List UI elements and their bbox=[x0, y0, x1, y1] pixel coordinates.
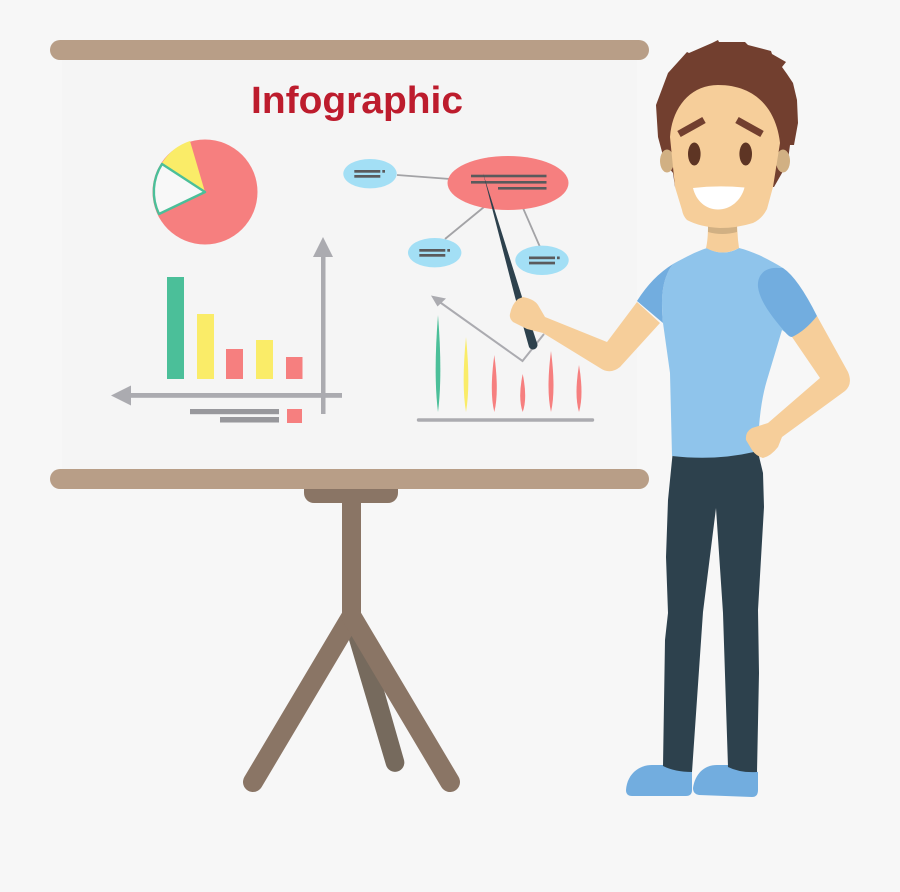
eyes bbox=[688, 142, 752, 166]
top rail bbox=[50, 40, 649, 60]
right arm and hand bbox=[746, 316, 850, 458]
paper bbox=[62, 60, 637, 470]
spike chart bbox=[418, 296, 592, 420]
bottom rail bbox=[50, 469, 649, 489]
trend arrow bbox=[431, 296, 544, 361]
shoes bbox=[626, 765, 758, 797]
connector lines bbox=[397, 175, 540, 247]
baseline bbox=[418, 418, 592, 422]
t-shirt body bbox=[662, 248, 792, 458]
spikes bbox=[436, 315, 582, 412]
neck bbox=[706, 225, 739, 252]
pointer stick bbox=[483, 173, 537, 349]
vertical axis arrow bbox=[313, 237, 333, 414]
blue node right bbox=[515, 246, 569, 275]
face bbox=[670, 85, 780, 228]
pie chart bbox=[152, 140, 258, 244]
pole bbox=[342, 495, 361, 620]
presentation board bbox=[50, 40, 649, 489]
title: Infographic bbox=[251, 80, 463, 122]
white outlined slice bbox=[154, 164, 205, 214]
mind map diagram bbox=[343, 156, 569, 275]
ears bbox=[660, 150, 790, 172]
easel stand bbox=[253, 489, 450, 782]
horizontal axis arrow bbox=[111, 386, 342, 406]
right sleeve bbox=[758, 268, 817, 337]
eyebrows bbox=[679, 120, 762, 134]
smile bbox=[693, 186, 744, 210]
yellow slice bbox=[162, 141, 205, 192]
left arm and hand bbox=[510, 297, 660, 371]
trousers bbox=[663, 448, 764, 772]
back leg bbox=[349, 630, 404, 772]
hair bbox=[656, 40, 798, 187]
presenter figure bbox=[510, 40, 850, 797]
front legs bbox=[253, 618, 450, 782]
neck shadow bbox=[708, 226, 737, 234]
left sleeve bbox=[637, 264, 673, 323]
bracket bbox=[304, 489, 398, 503]
bar chart bbox=[111, 237, 342, 423]
blue node left bbox=[343, 159, 397, 188]
bars bbox=[167, 277, 302, 379]
central red node bbox=[448, 156, 568, 210]
red slice bbox=[152, 140, 258, 244]
legend bbox=[190, 409, 302, 423]
blue node middle bbox=[408, 238, 461, 267]
